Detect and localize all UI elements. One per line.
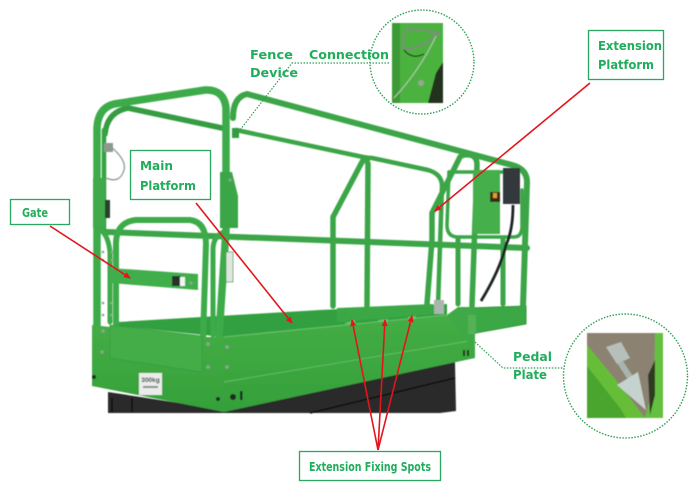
label: fence connection device: Device	[250, 66, 298, 80]
label box: extension platform: Extension	[598, 39, 662, 53]
front panel crease	[224, 340, 475, 382]
info plate on post	[226, 252, 233, 282]
right end connector	[447, 307, 475, 345]
centre post sleeve	[220, 172, 238, 228]
platform left panel	[92, 325, 224, 412]
hydraulic cable	[481, 205, 513, 301]
control box	[503, 168, 520, 204]
gate lower panel	[110, 325, 202, 372]
label: pedal plate: Pedal	[513, 350, 552, 364]
left post slot	[105, 200, 110, 218]
label box: extension fixing spots: Extension Fixing Spots	[309, 460, 431, 474]
label box: main platform	[130, 150, 210, 200]
black scissor lift base	[108, 362, 456, 413]
label box: extension platform	[588, 30, 664, 80]
label: pedal plate: Plate	[513, 368, 547, 382]
side arch right	[213, 232, 224, 335]
label box: extension platform: Platform	[598, 58, 654, 72]
fixing hinge bracket	[434, 300, 444, 314]
third arch	[427, 155, 477, 306]
capacity label	[139, 373, 162, 395]
inset: pedal plate	[564, 314, 688, 438]
dotted leader: pedal plate	[475, 342, 563, 368]
close-up photo	[392, 23, 443, 103]
fixing spot tabs	[345, 316, 416, 324]
lower rail of extension fence	[236, 130, 442, 306]
gate latch	[172, 276, 181, 286]
main front rail frame	[97, 90, 226, 372]
back rails of the fence	[107, 94, 527, 307]
dotted circle	[564, 314, 688, 438]
label box: gate	[10, 200, 70, 224]
label: fence connection device	[250, 48, 389, 80]
inset: fence connection device	[370, 10, 474, 114]
left post	[102, 130, 106, 232]
label box: main platform: Platform	[140, 179, 196, 193]
control panel plate	[473, 170, 500, 234]
label box: extension fixing spots	[300, 452, 440, 480]
dotted leader: fence connection	[240, 63, 389, 130]
platform back wall	[337, 304, 433, 322]
second arch	[333, 159, 368, 306]
label: fence connection device: Connection	[309, 48, 389, 62]
label box: main platform: Main	[140, 159, 173, 173]
scissor arm highlights	[112, 378, 455, 413]
label: pedal plate	[513, 350, 552, 382]
bolts and holes	[100, 178, 232, 369]
label: fence connection device: Fence	[250, 48, 293, 62]
safety pin lanyard	[106, 146, 124, 180]
middle rail	[107, 232, 527, 248]
extension posts	[458, 238, 503, 304]
platform inner floor	[118, 304, 447, 337]
platform front panel	[224, 315, 475, 412]
inner top rail	[105, 108, 222, 134]
close-up photo	[587, 333, 663, 418]
extension platform deck	[470, 306, 526, 334]
outer frame	[97, 90, 226, 336]
gate arch	[116, 220, 206, 372]
platform machine illustration	[92, 90, 527, 413]
arrow: gate	[50, 226, 130, 278]
platform machine illustration: 300kg	[141, 377, 160, 384]
gate cross bar	[110, 268, 198, 290]
left post sleeve	[93, 178, 105, 228]
arrow: main platform	[196, 203, 292, 323]
rail joint	[232, 128, 239, 138]
side arch	[97, 228, 110, 322]
control loop	[447, 172, 522, 237]
label box: gate: Gate	[22, 206, 48, 220]
dotted circle	[370, 10, 474, 114]
top rail of extension fence	[233, 94, 527, 307]
control switch	[490, 192, 500, 202]
arrows: extension fixing spots	[352, 316, 412, 450]
arrow: extension platform	[435, 83, 590, 211]
